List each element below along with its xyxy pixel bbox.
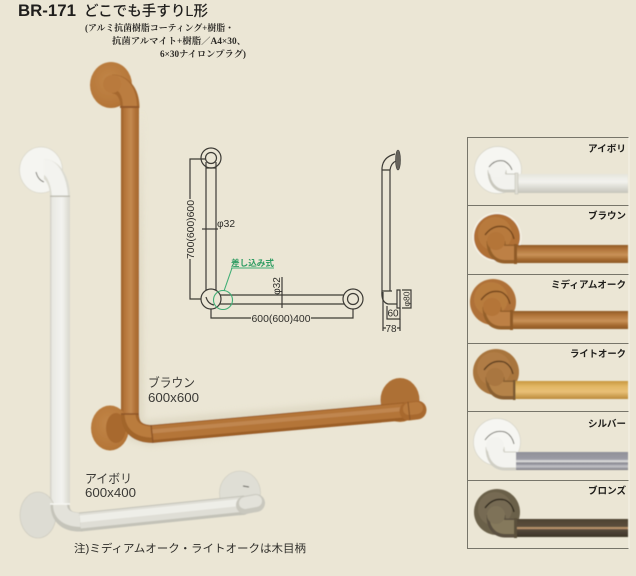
swatch label: bronze: ブロンズ bbox=[588, 485, 627, 497]
far elbow bbox=[245, 501, 256, 505]
far elbow bbox=[408, 402, 417, 420]
title: どこでも手すりL形 bbox=[84, 3, 208, 20]
bottom flange bbox=[20, 492, 56, 538]
swatch: silver bbox=[474, 418, 628, 470]
swatch: bronze bbox=[474, 489, 628, 538]
corner ring bbox=[201, 289, 221, 309]
horizontal pipe outline bbox=[220, 295, 344, 304]
diameter label horizontal pipe: φ32 bbox=[272, 277, 283, 295]
label: brown 600x600: 600x600 bbox=[148, 391, 199, 405]
insert-type joint callout bbox=[214, 258, 274, 310]
material specification text: (アルミ抗菌樹脂コーティング+樹脂・ bbox=[85, 22, 234, 33]
label: ivory 600x400: アイボリ bbox=[85, 472, 132, 486]
depth dimension 60 bbox=[387, 306, 400, 319]
material specification text bbox=[85, 22, 246, 59]
far flange bbox=[220, 471, 260, 515]
top ring bbox=[201, 148, 221, 168]
swatch: brown bbox=[472, 212, 628, 264]
top flange bbox=[20, 147, 62, 193]
right ring bbox=[343, 289, 363, 309]
technical drawing: side view bbox=[382, 150, 412, 335]
title bbox=[18, 1, 208, 20]
technical drawing: front view bbox=[186, 148, 363, 325]
depth label 60: 60 bbox=[387, 308, 399, 320]
right edge bbox=[628, 137, 630, 549]
top flange bbox=[90, 62, 132, 108]
material specification text: 抗菌アルマイト+樹脂／A4×30、 bbox=[112, 35, 246, 46]
vertical pipe bbox=[50, 196, 70, 504]
swatch label: medium oak: ミディアムオーク bbox=[551, 279, 626, 291]
height dimension label: 700(600)600 bbox=[186, 200, 197, 259]
swatch label: ivory: アイボリ bbox=[588, 143, 626, 155]
horizontal pipe bbox=[80, 502, 245, 522]
footnote: 注)ミディアムオーク・ライトオークは木目柄 bbox=[74, 541, 306, 555]
plate diameter dimension bbox=[402, 290, 411, 308]
photo: ivory L-shaped handrail bbox=[20, 147, 260, 538]
photo: brown L-shaped handrail bbox=[90, 62, 420, 450]
vertical pipe bbox=[121, 107, 139, 415]
bottom elbow bbox=[60, 504, 82, 522]
top elbow bbox=[103, 75, 130, 108]
far flange bbox=[380, 378, 420, 422]
height dimension bbox=[190, 159, 206, 299]
label: brown 600x600 bbox=[148, 375, 199, 405]
plate diameter label: φ80 bbox=[402, 291, 412, 306]
swatch: ivory bbox=[474, 146, 628, 194]
diameter mark vertical pipe bbox=[202, 228, 218, 230]
bottom elbow bbox=[130, 414, 153, 434]
horizontal pipe bbox=[152, 408, 409, 434]
vertical pipe outline bbox=[206, 162, 216, 290]
swatch label: brown: ブラウン bbox=[588, 210, 626, 222]
colour swatch panel bbox=[467, 137, 629, 549]
swatch label: light oak: ライトオーク bbox=[570, 349, 626, 360]
insert-type joint callout: 差し込み式 bbox=[231, 258, 274, 268]
title: BR-171 bbox=[18, 1, 76, 20]
top wall plate bbox=[396, 150, 400, 170]
swatch label: silver: シルバー bbox=[588, 419, 626, 430]
width dimension bbox=[211, 309, 353, 318]
bottom wall plate and elbow bbox=[382, 290, 400, 308]
label: ivory 600x400 bbox=[85, 472, 136, 500]
depth dimension 78 bbox=[383, 292, 400, 331]
swatch: light oak bbox=[473, 349, 628, 400]
bottom flange bbox=[91, 406, 129, 450]
top elbow bbox=[36, 167, 60, 197]
swatch: medium oak bbox=[470, 279, 628, 330]
width dimension label: 600(600)400 bbox=[252, 314, 311, 325]
depth label 78: 78 bbox=[385, 324, 397, 335]
label: ivory 600x400: 600x400 bbox=[85, 486, 136, 500]
diameter label vertical pipe: φ32 bbox=[217, 219, 235, 230]
material specification text: 6×30ナイロンプラグ) bbox=[160, 48, 246, 59]
diameter mark horizontal pipe bbox=[281, 277, 283, 308]
panel frame bbox=[467, 137, 629, 549]
label: brown 600x600: ブラウン bbox=[148, 375, 195, 390]
side pipe bbox=[382, 154, 396, 291]
